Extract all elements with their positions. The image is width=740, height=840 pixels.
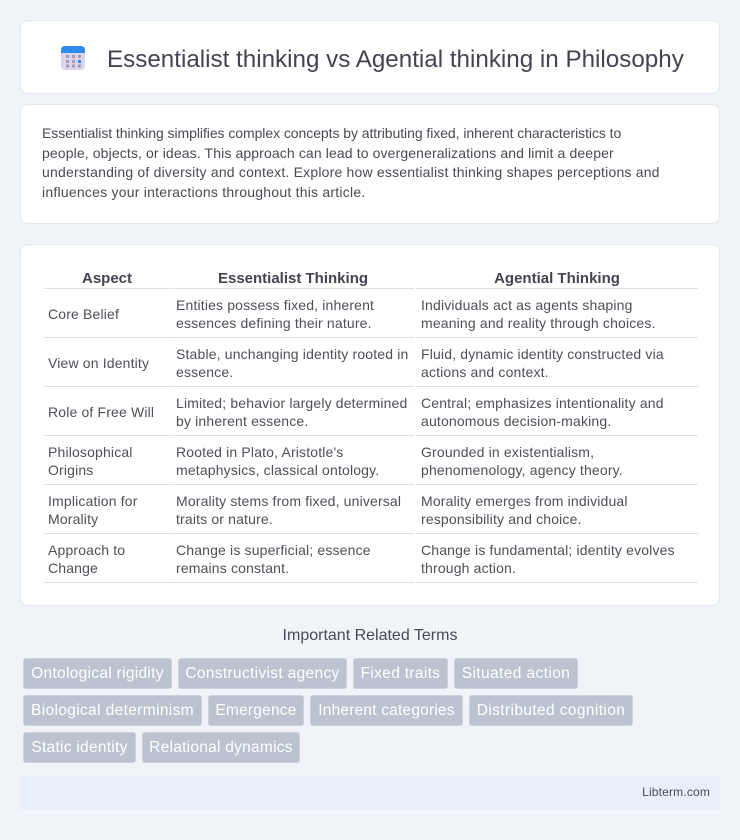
row: approach to change: remains constant. xyxy=(176,560,289,576)
row: implication for morality: Implication for xyxy=(48,493,138,509)
tag xyxy=(310,695,463,726)
tag xyxy=(178,658,347,689)
tag: Biological determinism xyxy=(31,702,194,719)
related terms heading: Important Related Terms xyxy=(283,627,457,644)
tag: Emergence xyxy=(215,702,297,719)
tag xyxy=(142,732,300,763)
row: implication for morality: traits or nature. xyxy=(176,511,273,527)
row: core belief: Core Belief xyxy=(48,306,119,322)
tag: Situated action xyxy=(462,665,570,682)
row: core belief: meaning and reality through choices. xyxy=(421,315,656,331)
row: philosophical origins: Philosophical xyxy=(48,444,133,460)
icon: calendar xyxy=(61,46,85,70)
tag: Distributed cognition xyxy=(477,702,625,719)
row: approach to change: Change is superficial; essence xyxy=(176,542,371,558)
intro text: people, objects, or ideas. This approach can lead to overgeneralizations and limit a deeper xyxy=(42,145,614,161)
tag xyxy=(208,695,304,726)
row: view on identity: Fluid, dynamic identity constructed via xyxy=(421,346,664,362)
row: role of free will xyxy=(48,395,664,429)
tag xyxy=(353,658,448,689)
row: philosophical origins: metaphysics, classical ontology. xyxy=(176,462,379,478)
row: implication for morality: responsibility and choice. xyxy=(421,511,582,527)
footer credit: Libterm.com xyxy=(642,785,710,799)
row: core belief xyxy=(48,297,656,331)
tag xyxy=(23,695,202,726)
row: approach to change: Change xyxy=(48,560,98,576)
tag xyxy=(469,695,633,726)
tag: Inherent categories xyxy=(318,702,455,719)
row: role of free will: Limited; behavior largely determined xyxy=(176,395,407,411)
table header xyxy=(82,270,620,287)
intro text: Essentialist thinking simplifies complex concepts by attributing fixed, inherent characteristics to xyxy=(42,125,621,141)
intro panel xyxy=(20,104,720,224)
row: role of free will: Central; emphasizes intentionality and xyxy=(421,395,664,411)
row: implication for morality: Morality xyxy=(48,511,98,527)
row: approach to change: Change is fundamental; identity evolves xyxy=(421,542,675,558)
tag xyxy=(23,658,172,689)
tag: Fixed traits xyxy=(361,665,440,682)
row: view on identity: essence. xyxy=(176,364,233,380)
tag: Ontological rigidity xyxy=(31,665,164,682)
row: core belief: essences defining their nature. xyxy=(176,315,372,331)
related terms tags xyxy=(23,658,633,763)
row: philosophical origins: phenomenology, agency theory. xyxy=(421,462,623,478)
tag xyxy=(454,658,578,689)
row: role of free will: by inherent essence. xyxy=(176,413,308,429)
row: approach to change: Approach to xyxy=(48,542,125,558)
tag: Static identity xyxy=(31,739,128,756)
intro text: understanding of diversity and context. Explore how essentialist thinking shapes perceptions and xyxy=(42,164,660,180)
row: approach to change: through action. xyxy=(421,560,516,576)
row: core belief: Entities possess fixed, inherent xyxy=(176,297,374,313)
row: core belief: Individuals act as agents shaping xyxy=(421,297,633,313)
row: implication for morality: Morality emerges from individual xyxy=(421,493,628,509)
row: view on identity: View on Identity xyxy=(48,355,149,371)
table header: Agential Thinking xyxy=(494,270,620,287)
row: view on identity: actions and context. xyxy=(421,364,549,380)
comparison table panel xyxy=(20,244,720,606)
row: implication for morality: Morality stems from fixed, universal xyxy=(176,493,401,509)
row: philosophical origins xyxy=(48,444,623,478)
row: philosophical origins: Grounded in existentialism, xyxy=(421,444,594,460)
row: implication for morality xyxy=(48,493,628,527)
row: approach to change xyxy=(48,542,675,576)
row: philosophical origins: Rooted in Plato, Aristotle's xyxy=(176,444,343,460)
intro text xyxy=(42,125,660,200)
row: view on identity xyxy=(48,346,664,380)
header panel xyxy=(20,20,720,94)
tag: Constructivist agency xyxy=(185,665,340,682)
table header: Aspect xyxy=(82,270,132,287)
tag xyxy=(23,732,136,763)
footer bar xyxy=(20,776,720,810)
title: Essentialist thinking vs Agential thinking in Philosophy xyxy=(107,46,684,73)
row: role of free will: Role of Free Will xyxy=(48,404,154,420)
table header: Essentialist Thinking xyxy=(218,270,368,287)
intro text: influences your interactions throughout this article. xyxy=(42,184,365,200)
row: view on identity: Stable, unchanging identity rooted in xyxy=(176,346,408,362)
tag: Relational dynamics xyxy=(149,739,293,756)
row: philosophical origins: Origins xyxy=(48,462,93,478)
row: role of free will: autonomous decision-making. xyxy=(421,413,611,429)
